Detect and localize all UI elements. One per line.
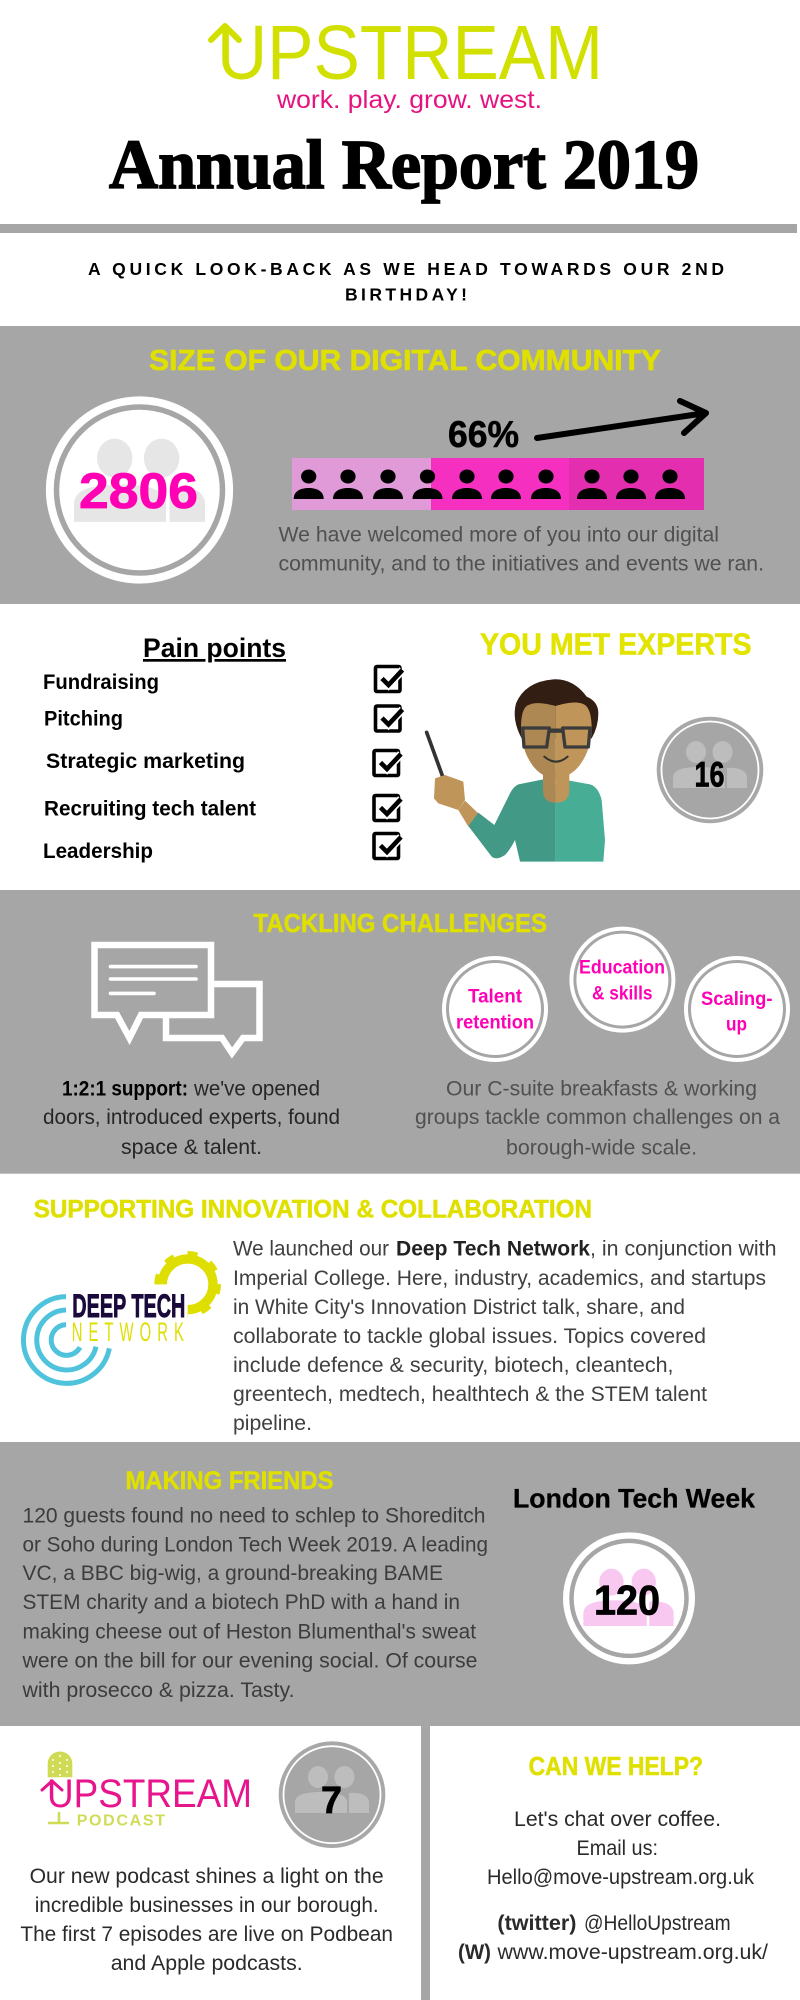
- text: making friends: VC, a BBC big-wig, a ground-breaking BAME: [22, 1561, 443, 1585]
- text: social links: (W): [458, 1940, 491, 1964]
- icon: microphone: [48, 1752, 72, 1823]
- text: C-suite breakfasts: Our C-suite breakfasts & working: [446, 1077, 757, 1101]
- stat circle: 120: 120: [594, 1577, 660, 1624]
- text: podcast: Our new podcast shines a light on the: [30, 1864, 384, 1888]
- panel: size of digital community: [0, 326, 800, 604]
- subtitle: A QUICK LOOK-BACK AS WE HEAD TOWARDS OUR 2ND: [88, 259, 724, 279]
- icon: speech bubbles: [94, 945, 260, 1053]
- logo: Upstream podcast: PODCAST: [77, 1813, 165, 1830]
- stat circle: 7: [279, 1741, 385, 1848]
- community text: We have welcomed more of you into our digital: [278, 523, 719, 547]
- text: 1:2:1 support: we've opened: [193, 1077, 320, 1101]
- panel: making friends: [0, 1442, 800, 1726]
- text: deep tech network: Imperial College. Here, industry, academics, and startups: [233, 1266, 766, 1290]
- list of pain points: Strategic marketing: [46, 750, 245, 773]
- text: making friends: or Soho during London Tech Week 2019. A leading: [22, 1532, 488, 1556]
- heading: YOU MET EXPERTS: [480, 627, 752, 662]
- icon: logo arrow: [211, 26, 239, 40]
- heading: SUPPORTING INNOVATION & COLLABORATION: [34, 1196, 592, 1224]
- text: deep tech network: We launched our: [233, 1237, 389, 1261]
- circle: education and skills: [569, 927, 675, 1033]
- subtitle: BIRTHDAY!: [345, 284, 467, 304]
- subtitle: [88, 259, 724, 304]
- logo: Deep Tech Network: [23, 1254, 218, 1383]
- logo: Upstream: [211, 10, 603, 114]
- list of pain points: Fundraising: [43, 671, 159, 694]
- panel: tackling challenges: [0, 890, 800, 1174]
- panel: pain points: [43, 633, 402, 863]
- text: podcast: The first 7 episodes are live on Podbean: [20, 1922, 393, 1946]
- text: social links: (twitter): [497, 1911, 576, 1935]
- heading: MAKING FRIENDS: [126, 1467, 334, 1495]
- logo wordmark: UPSTREAM: [217, 10, 603, 96]
- list of pain points: Recruiting tech talent: [44, 798, 256, 820]
- text: social links: [458, 1911, 768, 1964]
- stat circle: 7: 7: [321, 1780, 342, 1822]
- logo: Upstream podcast: [42, 1752, 252, 1830]
- growth figure: 66%: 66%: [448, 414, 519, 455]
- text: deep tech network: Deep Tech Network: [396, 1237, 590, 1261]
- text: deep tech network: [233, 1237, 776, 1435]
- text: contact email: Let's chat over coffee.: [514, 1807, 721, 1831]
- stat circle: 2806: 2806: [79, 463, 198, 519]
- text: podcast: and Apple podcasts.: [111, 1951, 303, 1975]
- text: 1:2:1 support: space & talent.: [121, 1135, 262, 1159]
- panel: supporting innovation and collaboration: [23, 1196, 776, 1435]
- text: C-suite breakfasts: borough-wide scale.: [506, 1136, 697, 1160]
- text: deep tech network: include defence & security, biotech, cleantech,: [233, 1353, 674, 1377]
- text: C-suite breakfasts: groups tackle common challenges on a: [415, 1105, 780, 1129]
- text: making friends: [22, 1504, 488, 1702]
- heading: London Tech Week: London Tech Week: [513, 1484, 756, 1514]
- text: 1:2:1 support: 1:2:1 support:: [62, 1077, 188, 1101]
- text: C-suite breakfasts: [415, 1077, 780, 1160]
- list of pain points: Pitching: [44, 708, 123, 730]
- text: contact email: Hello@move-upstream.org.uk: [487, 1865, 754, 1889]
- circle: scaling-up: Scaling-: [701, 989, 772, 1010]
- text: deep tech network: , in conjunction with: [590, 1237, 776, 1261]
- text: contact email: Email us:: [576, 1836, 658, 1860]
- text: making friends: STEM charity and a biotech PhD with a hand in: [22, 1590, 460, 1614]
- circle: talent retention: [442, 956, 548, 1062]
- community text: [278, 523, 764, 576]
- text: 1:2:1 support: [43, 1077, 340, 1159]
- text: deep tech network: greentech, medtech, healthtech & the STEM talent: [233, 1382, 707, 1406]
- text: deep tech network: in White City's Innovation District talk, share, and: [233, 1295, 685, 1319]
- text: making friends: were on the bill for our evening social. Of course: [22, 1648, 477, 1672]
- text: making friends: making cheese out of Heston Blumenthal's sweat: [22, 1620, 476, 1644]
- arrow: growth: [537, 401, 706, 438]
- panel: you met experts: [427, 627, 763, 862]
- text: deep tech network: collaborate to tackle global issues. Topics covered: [233, 1324, 706, 1348]
- heading: SIZE OF OUR DIGITAL COMMUNITY: [149, 345, 661, 377]
- circle: scaling-up: up: [726, 1014, 747, 1036]
- icon: expert with pointer: [427, 679, 605, 862]
- panel: podcast: [20, 1741, 393, 1975]
- text: social links: www.move-upstream.org.uk/: [497, 1940, 768, 1964]
- logo: Deep Tech Network: NETWORK: [72, 1316, 184, 1347]
- logo: Upstream podcast: UPSTREAM: [47, 1772, 252, 1816]
- heading: TACKLING CHALLENGES: [254, 910, 547, 938]
- panel: can we help: [458, 1751, 768, 1964]
- stat circle: 2806: [46, 396, 233, 584]
- list of pain points: Leadership: [43, 840, 153, 863]
- bar of people icons: [292, 458, 704, 510]
- stat circle: 120: [563, 1532, 695, 1664]
- text: podcast: [20, 1864, 393, 1975]
- list of pain points: [43, 671, 256, 863]
- text: social links: @HelloUpstream: [584, 1911, 731, 1935]
- circle: talent retention: Talent: [468, 987, 523, 1008]
- text: making friends: 120 guests found no need to schlep to Shoreditch: [22, 1504, 486, 1528]
- text: making friends: with prosecco & pizza. Tasty.: [22, 1678, 294, 1702]
- logo: Deep Tech Network: DEEP TECH: [72, 1288, 185, 1324]
- checkboxes: [374, 666, 402, 858]
- title: Annual Report 2019: [109, 127, 699, 204]
- text: 1:2:1 support: doors, introduced experts, found: [43, 1105, 340, 1129]
- circle: talent retention: retention: [456, 1013, 534, 1034]
- text: contact email: [487, 1807, 754, 1889]
- heading: pain points: Pain points: [143, 633, 286, 663]
- circle: education and skills: & skills: [592, 984, 652, 1004]
- stat circle: 16: 16: [694, 756, 724, 795]
- community text: community, and to the initiatives and events we ran.: [278, 552, 764, 576]
- text: podcast: incredible businesses in our borough.: [35, 1893, 379, 1917]
- tagline: work. play. grow. west.: [276, 86, 542, 114]
- stat circle: 16: [657, 717, 763, 823]
- text: deep tech network: pipeline.: [233, 1411, 312, 1435]
- heading: CAN WE HELP?: [529, 1751, 703, 1781]
- circle: education and skills: Education: [579, 958, 665, 978]
- circle: scaling-up: [684, 956, 790, 1062]
